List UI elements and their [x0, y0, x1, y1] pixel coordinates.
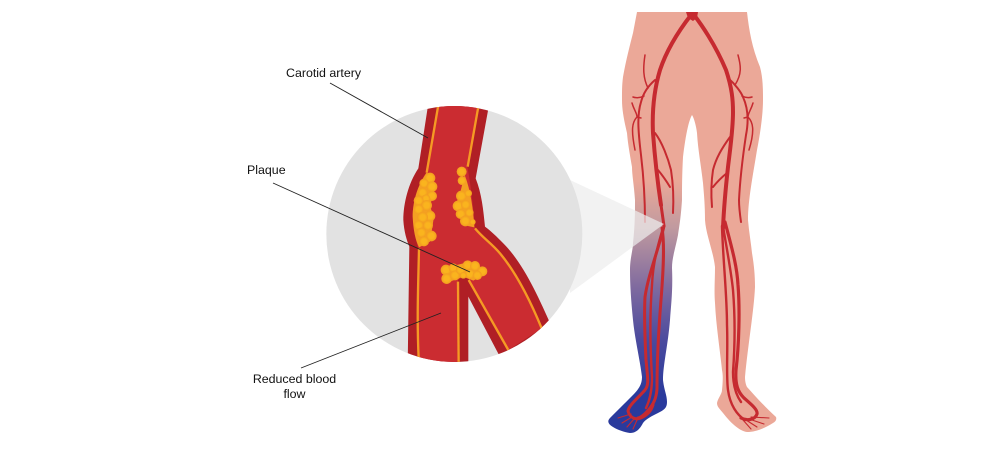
label: Reduced blood flow [253, 313, 441, 401]
right leg [692, 12, 776, 432]
arteries: right leg [694, 15, 769, 429]
left leg with poor circulation gradient [608, 12, 692, 433]
plaque deposit: upper left [413, 173, 437, 247]
artery outer wall [403, 103, 552, 367]
artery stem at the pelvis [686, 12, 698, 21]
label: Reduced blood flow: flow [283, 387, 306, 401]
artery cross-section [403, 103, 552, 367]
plaque deposit: bifurcation [441, 260, 487, 284]
label: Carotid artery: Carotid artery [286, 66, 362, 80]
label: Reduced blood flow: Reduced blood [253, 372, 336, 386]
callout wedge [570, 180, 664, 293]
arteries: left leg [618, 15, 691, 429]
artery lumen [413, 103, 542, 367]
plaque deposit: upper right [453, 167, 476, 227]
magnified circle [326, 103, 582, 367]
label: Plaque: Plaque [247, 163, 286, 177]
figure: legs with arteries [608, 12, 776, 433]
label: Plaque [247, 163, 470, 272]
orange inner linings [418, 105, 542, 363]
label: Carotid artery [286, 66, 428, 138]
grey circle background [326, 106, 582, 362]
